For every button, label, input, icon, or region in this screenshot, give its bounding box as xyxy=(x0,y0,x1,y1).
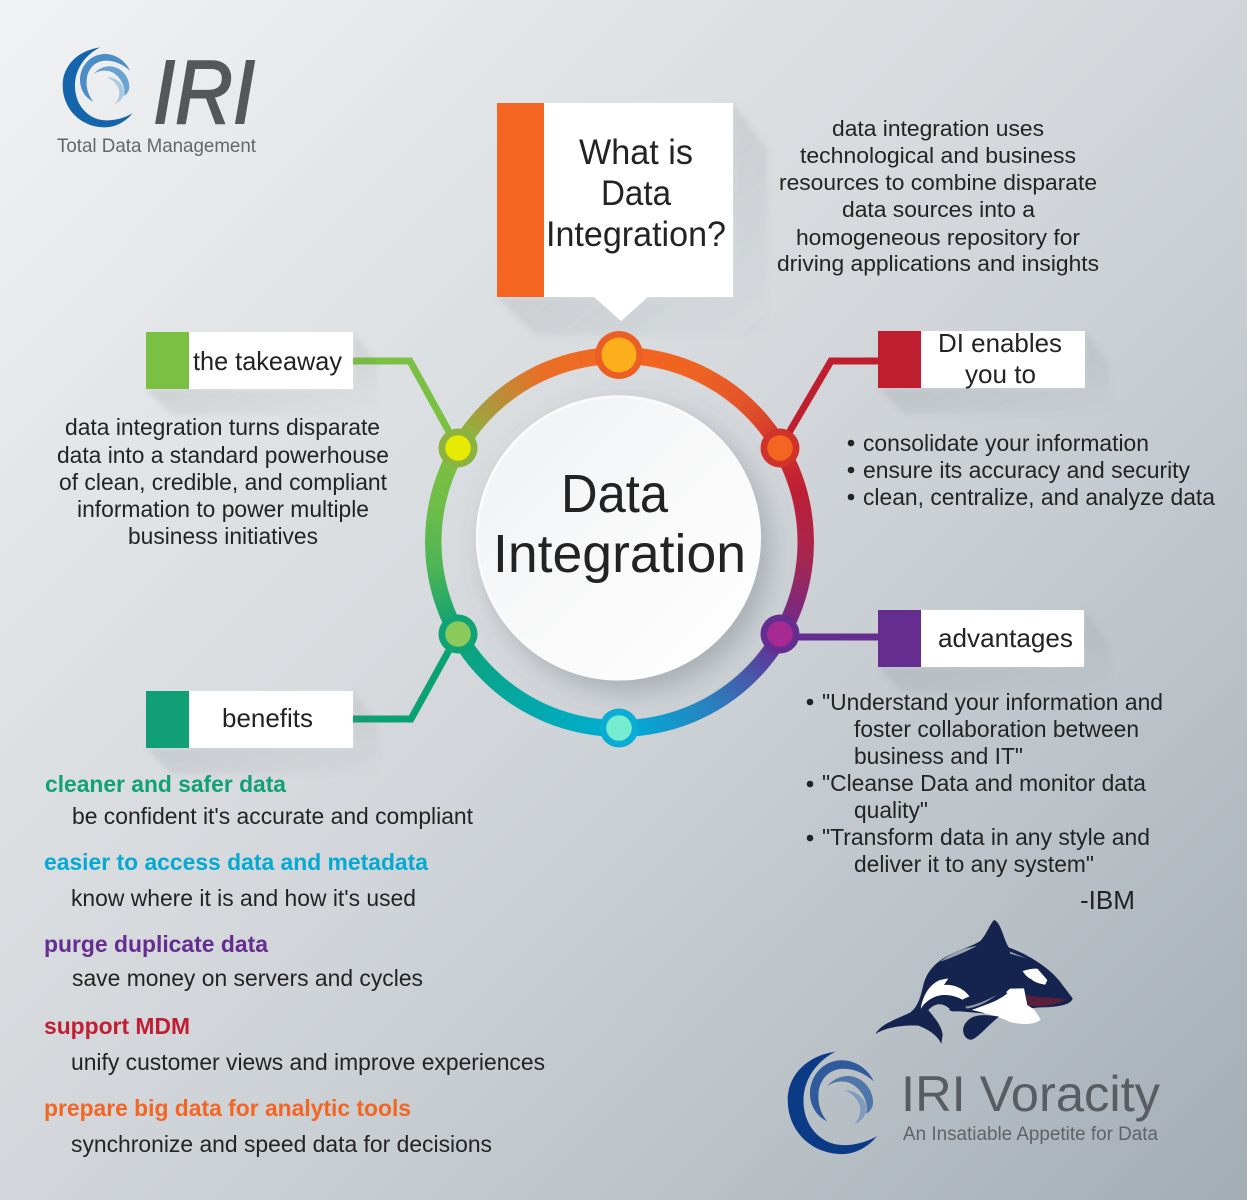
logo tagline: An Insatiable Appetite for Data xyxy=(903,1124,1158,1145)
heading: What is Data Integration: Data xyxy=(601,174,671,213)
heading: What is Data Integration: Integration? xyxy=(546,215,726,254)
panel: DI enables you to: you to xyxy=(965,359,1036,389)
text block: DI bullets xyxy=(848,430,1215,510)
text block: definition: data integration uses xyxy=(832,116,1044,141)
text block: DI bullets: clean, centralize, and analyze data xyxy=(863,484,1215,510)
text block: takeaway: of clean, credible, and compliant xyxy=(59,469,388,495)
text block: takeaway: business initiatives xyxy=(128,523,318,549)
text block: DI bullets: consolidate your information xyxy=(863,430,1149,456)
text block: advantages quotes: quality" xyxy=(854,797,928,823)
icon: Voracity swirl xyxy=(788,1052,877,1154)
text block: advantages quotes: "Understand your information and xyxy=(822,689,1163,715)
panel: DI enables you to: DI enables xyxy=(938,328,1062,358)
text block: benefits list xyxy=(44,771,545,1157)
text block: advantages quotes: deliver it to any system" xyxy=(854,851,1094,877)
connector: DI enables xyxy=(780,361,878,448)
text block: definition: homogeneous repository for xyxy=(796,225,1081,250)
connector: benefits xyxy=(353,634,458,719)
panel: advantages: advantages xyxy=(938,623,1073,653)
panel: What is Data Integration xyxy=(497,103,768,335)
text block: DI bullets: ensure its accuracy and security xyxy=(863,457,1190,483)
text block: takeaway: information to power multiple xyxy=(77,496,369,522)
panel: benefits xyxy=(146,691,378,774)
node: top xyxy=(595,331,643,379)
centre circle: Data Integration: Data xyxy=(561,464,669,524)
connector: takeaway xyxy=(353,361,458,448)
panel: the takeaway xyxy=(146,332,378,415)
connector: advantages xyxy=(780,634,878,640)
node: upper left xyxy=(438,428,478,468)
text block: definition: resources to combine disparate xyxy=(779,170,1097,195)
panel: advantages xyxy=(878,610,1110,693)
text block: advantages quotes: foster collaboration between xyxy=(854,716,1139,742)
text block: benefits list: synchronize and speed data for decisions xyxy=(71,1131,492,1157)
text block: benefits list: know where it is and how it's used xyxy=(71,885,416,911)
panel: DI enables you to xyxy=(878,328,1110,414)
text block: benefits list: unify customer views and improve experiences xyxy=(71,1049,545,1075)
text block: takeaway: data integration turns disparate xyxy=(65,414,380,440)
node: lower right xyxy=(760,614,800,654)
text block: benefits list: cleaner and safer data xyxy=(45,771,286,797)
text block: definition: data sources into a xyxy=(842,197,1035,222)
logo wordmark: IRI xyxy=(153,43,255,143)
centre circle: Data Integration: Integration xyxy=(493,524,746,584)
icon: orca xyxy=(875,920,1073,1044)
text block: benefits list: easier to access data and metadata xyxy=(44,849,428,875)
text block: takeaway: data into a standard powerhouse xyxy=(57,442,389,468)
ring: gradient circle xyxy=(425,347,814,737)
icon: IRI swirl xyxy=(63,47,132,127)
text block: benefits list: save money on servers and cycles xyxy=(72,965,423,991)
text block: benefits list: be confident it's accurate and compliant xyxy=(72,803,474,829)
heading: What is Data Integration: What is xyxy=(579,133,693,172)
centre circle: Data Integration xyxy=(476,396,761,680)
text block: definition: technological and business xyxy=(800,143,1076,168)
panel: the takeaway: the takeaway xyxy=(193,346,342,376)
logo: IRI Total Data Management xyxy=(57,43,257,157)
text block: benefits list: prepare big data for analytic tools xyxy=(44,1095,411,1121)
node: lower left xyxy=(438,614,478,654)
text block: advantages quotes: "Transform data in any style and xyxy=(822,824,1150,850)
text block: benefits list: purge duplicate data xyxy=(44,931,268,957)
logo tagline: Total Data Management xyxy=(57,135,257,157)
panel: benefits: benefits xyxy=(222,703,313,733)
attribution: -IBM xyxy=(1080,885,1135,915)
text block: advantages quotes: business and IT" xyxy=(854,743,1023,769)
node: bottom xyxy=(600,708,638,748)
node: upper right xyxy=(760,428,800,468)
text block: definition: driving applications and insights xyxy=(777,251,1099,276)
logo wordmark: IRI Voracity xyxy=(901,1066,1160,1122)
logo: IRI Voracity xyxy=(788,1052,1160,1154)
text block: advantages quotes: "Cleanse Data and monitor data xyxy=(822,770,1146,796)
text block: benefits list: support MDM xyxy=(44,1013,190,1039)
text block: advantages quotes xyxy=(807,689,1169,915)
